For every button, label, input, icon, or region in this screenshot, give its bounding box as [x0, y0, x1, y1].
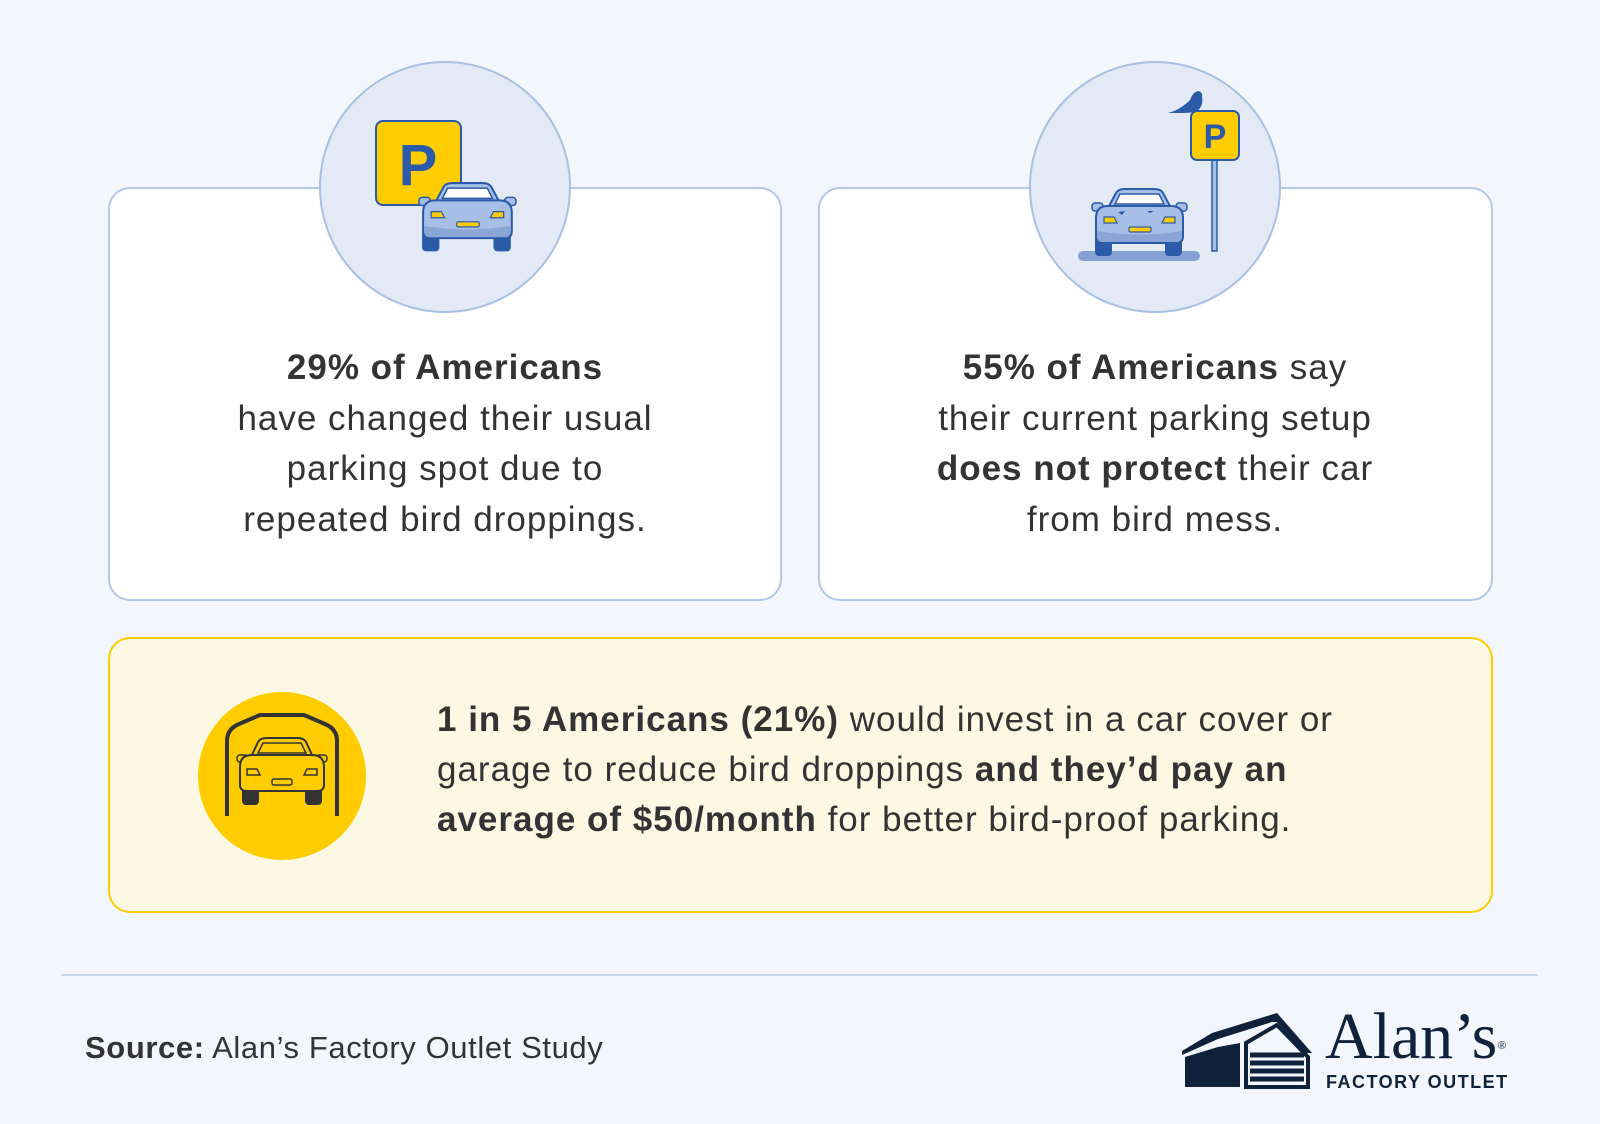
logo: Alan's Factory Outlet: Alan’s® [1325, 1000, 1506, 1073]
text: card 1 stat [237, 348, 653, 538]
text: source: Source: Alan’s Factory Outlet Study [85, 1030, 603, 1065]
logo: Alan's Factory Outlet: FACTORY OUTLET [1326, 1072, 1509, 1092]
text: card 2 stat [937, 348, 1373, 538]
icon: parking sign with car: P [399, 133, 437, 198]
icon: car in garage [198, 692, 366, 860]
text: card 2 stat: does not protect their car [937, 449, 1373, 488]
text: card 2 stat: from bird mess. [1027, 500, 1283, 538]
text: card 1 stat: have changed their usual [237, 398, 653, 438]
text: card 1 stat: parking spot due to [287, 449, 603, 488]
text: card 2 stat: 55% of Americans say [963, 348, 1347, 387]
text: callout stat: average of $50/month for better bird-proof parking. [437, 800, 1291, 839]
text: callout stat [437, 700, 1333, 839]
icon: parking sign with car [319, 61, 571, 313]
text: card 2 stat: their current parking setup [938, 398, 1372, 438]
text: callout stat: garage to reduce bird droppings and they’d pay an [437, 750, 1288, 789]
logo: Alan's Factory Outlet [1182, 1000, 1509, 1092]
icon: car under sign with bird: P [1204, 118, 1226, 156]
text: card 1 stat: 29% of Americans [287, 348, 603, 387]
panel: yellow callout [108, 637, 1493, 913]
text: card 1 stat: repeated bird droppings. [243, 500, 647, 538]
text: callout stat: 1 in 5 Americans (21%) would invest in a car cover or [437, 700, 1333, 739]
panel: card 2 [818, 187, 1493, 601]
icon: car under sign with bird [1029, 61, 1281, 313]
panel: card 1 [108, 187, 782, 601]
